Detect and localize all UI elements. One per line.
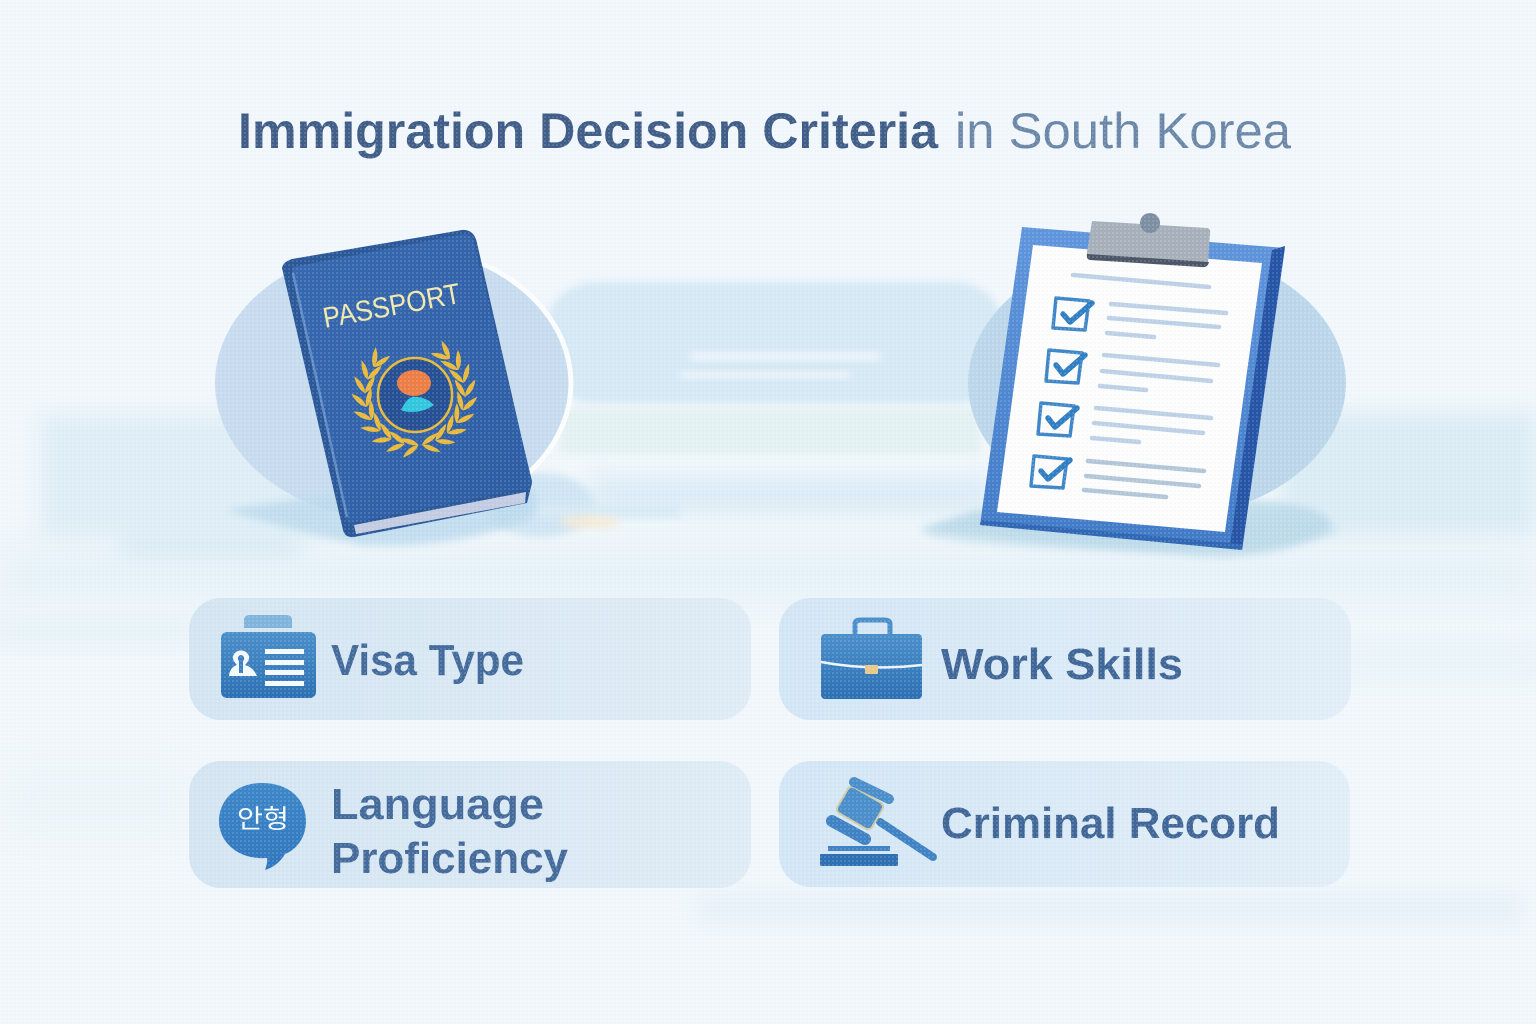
checklist lines [1073, 275, 1226, 442]
passport wordmark: PASSPORT [320, 278, 463, 335]
panel: visa type [189, 598, 751, 720]
label: visa type: Visa Type [331, 636, 524, 685]
title: Immigration Decision Criteria [238, 103, 939, 159]
label: language proficiency [331, 780, 569, 883]
title: in South Korea [955, 103, 1291, 159]
icon: briefcase [821, 620, 922, 699]
label: language proficiency: Proficiency [331, 834, 569, 883]
circle backdrop: clipboard [968, 247, 1346, 519]
panel: criminal record [779, 761, 1350, 887]
panel: work skills [779, 598, 1351, 720]
label: work skills: Work Skills [941, 640, 1183, 689]
icon: passport [282, 230, 532, 537]
icon: gavel [820, 782, 933, 866]
checkbox 1 [1053, 298, 1092, 330]
shadow under passport [225, 486, 537, 546]
icon: speech bubble: 안형 [237, 804, 289, 834]
checkbox 2 [1046, 350, 1085, 383]
clip [1087, 213, 1210, 267]
title [238, 103, 1291, 159]
label: language proficiency: Language [331, 780, 544, 829]
checkbox 3 [1038, 403, 1077, 436]
icon: id card [221, 615, 316, 698]
shadow under clipboard [925, 500, 1331, 556]
emblem [345, 336, 485, 464]
label: criminal record: Criminal Record [941, 799, 1280, 848]
icon: speech bubble [219, 783, 306, 870]
icon: clipboard checklist [980, 213, 1285, 550]
checkbox 4 [1031, 456, 1070, 488]
circle backdrop: passport [215, 247, 571, 519]
panel: language proficiency [189, 761, 751, 888]
